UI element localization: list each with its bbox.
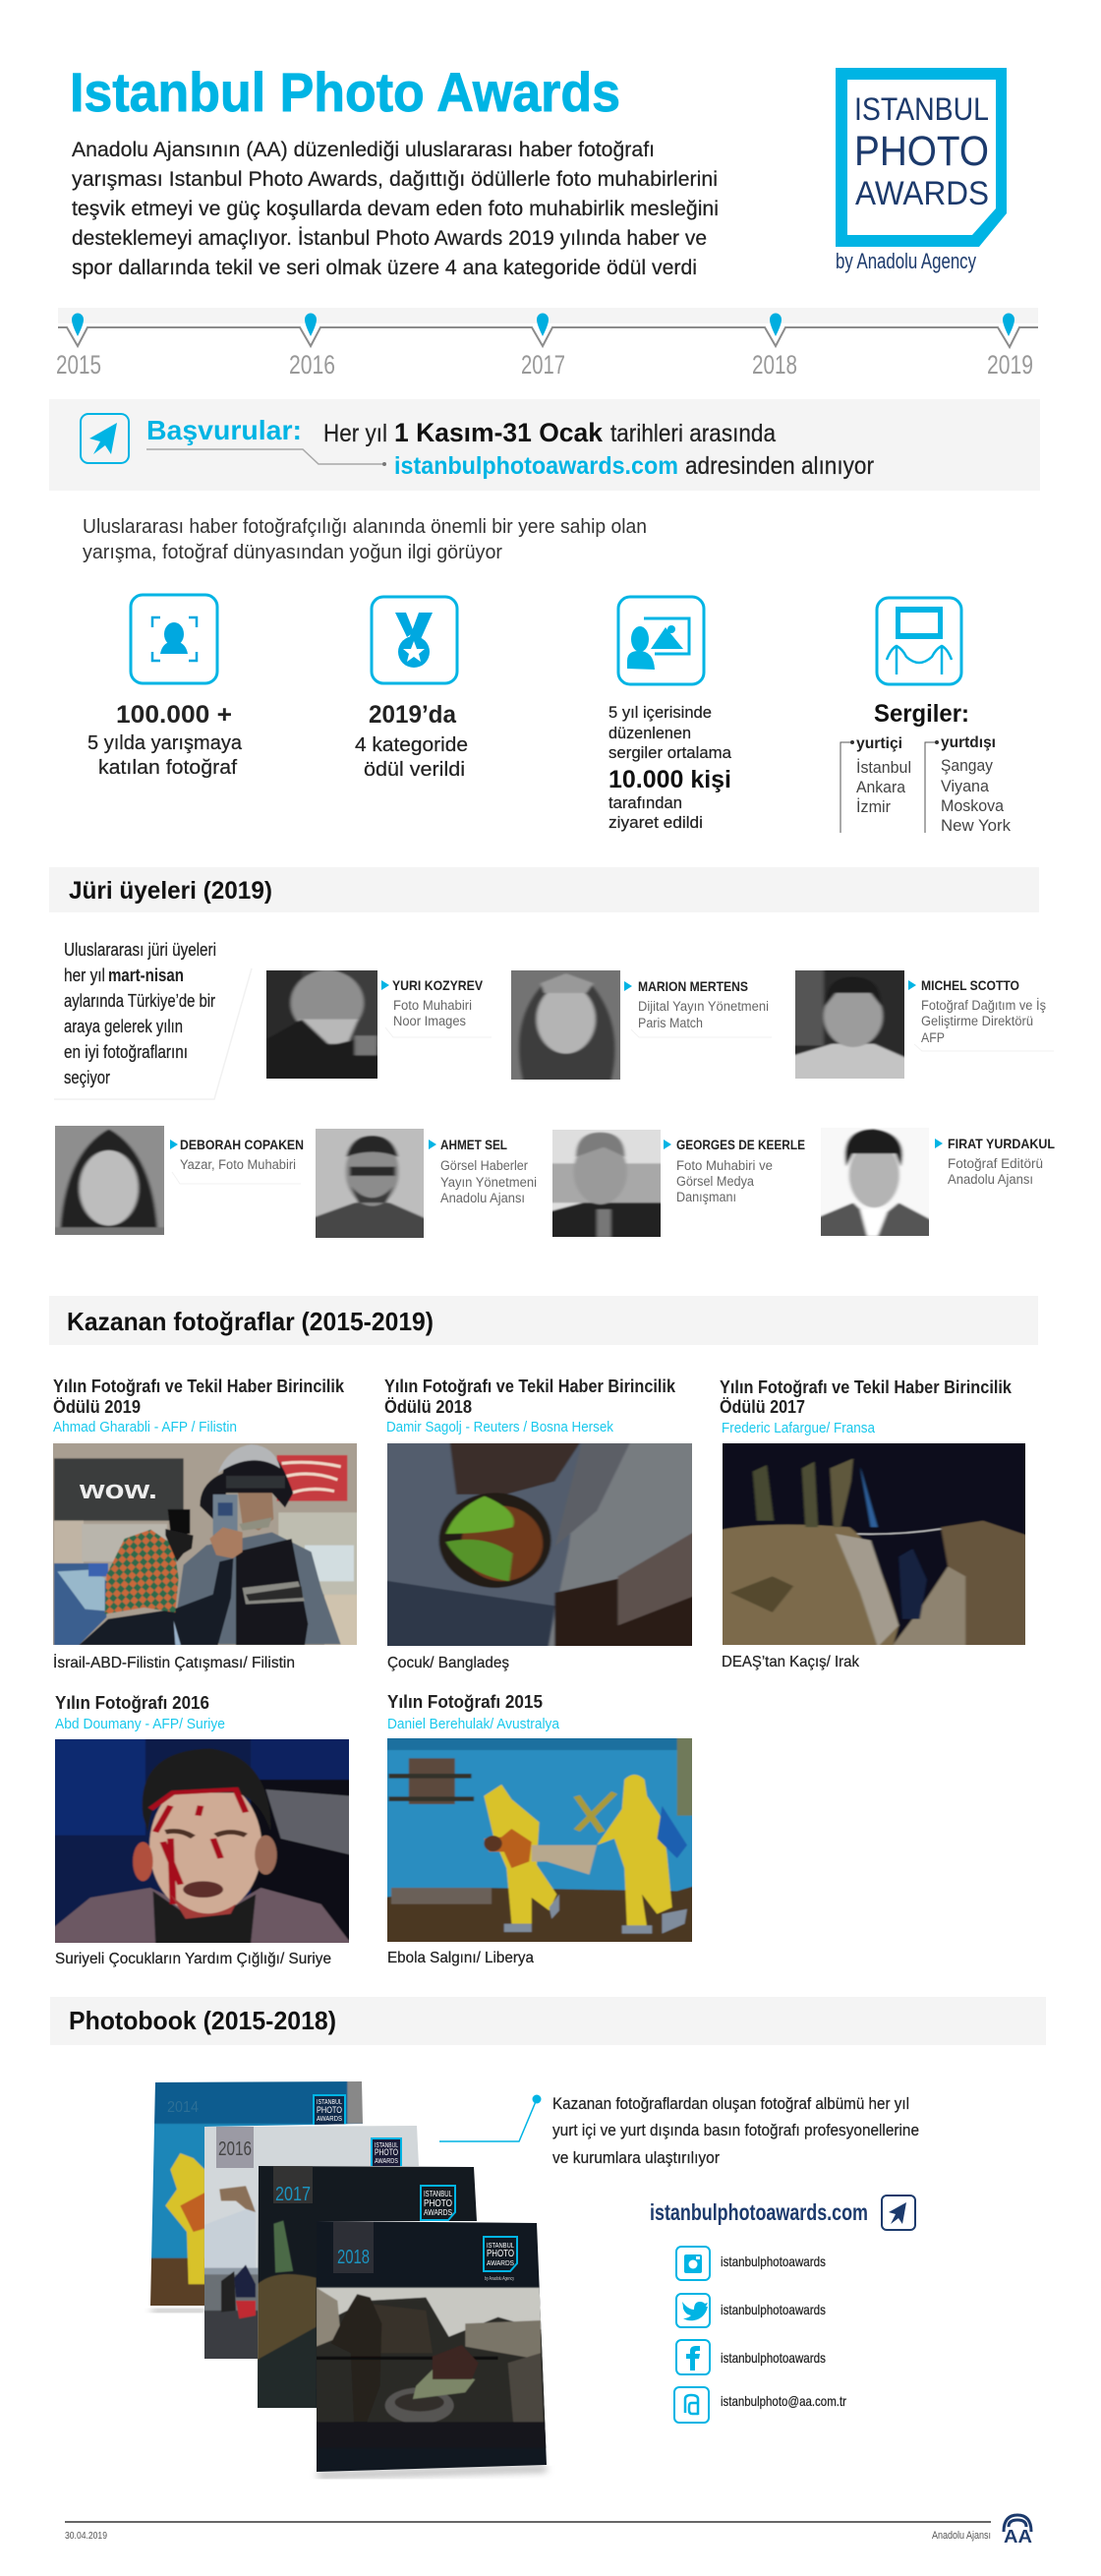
jury name: Marion Mertens: Paris Match [638, 1016, 703, 1030]
jury name: Michel Scotto: MICHEL SCOTTO [921, 977, 1019, 993]
book 2016: PHOTO [375, 2147, 398, 2157]
photo: Israel-Palestine clash: wow. [79, 1475, 157, 1504]
exhibitions list: Moskova [941, 796, 1005, 815]
book 2018: AWARDS [487, 2260, 514, 2267]
jury name: Georges de Keerle: Danışmanı [676, 1190, 736, 1204]
social: email [674, 2387, 846, 2423]
jury name: Ahmet Sel [429, 1137, 537, 1205]
stat: 2019 categories: 2019’da [369, 701, 457, 729]
footer [65, 2515, 1032, 2547]
jury name: Firat Yurdakul: Anadolu Ajansı [948, 1172, 1033, 1187]
photo: Ebola outbreak [381, 1733, 700, 1947]
jury intro text: Uluslararası jüri üyeleri [64, 940, 216, 960]
award 2019 heading: Ahmad Gharabli - AFP / Filistin [53, 1419, 237, 1435]
jury name: Ahmet Sel: Görsel Haberler [440, 1158, 528, 1173]
jury photo: Michel Scotto [795, 970, 904, 1079]
timeline 2015-2019 [56, 308, 1038, 380]
jury name: Michel Scotto [908, 977, 1054, 1051]
jury name: Georges de Keerle: GEORGES DE KEERLE [676, 1137, 805, 1152]
award 2019 heading [53, 1376, 345, 1435]
stat: 100.000 photographs [87, 701, 243, 779]
jury name: Firat Yurdakul: Fotoğraf Editörü [948, 1156, 1043, 1171]
award 2015 heading: Daniel Berehulak/ Avustralya [387, 1716, 560, 1732]
website link: istanbulphotoawards.com [650, 2199, 868, 2225]
jury name: Marion Mertens [624, 978, 772, 1037]
stat: 2019 categories: ödül verildi [364, 759, 465, 781]
jury name: Marion Mertens: Dijital Yayın Yönetmeni [638, 999, 769, 1014]
subtitle text: yarışma, fotoğraf dünyasından yoğun ilgi görüyor [83, 542, 502, 563]
award 2016 heading [55, 1693, 225, 1732]
award 2016 heading: Yılın Fotoğrafı 2016 [55, 1693, 209, 1713]
exhibitions list: İzmir [856, 797, 891, 816]
icon: exhibition visitor [618, 597, 704, 684]
award 2018 heading [384, 1376, 676, 1435]
photo: Syrian child [50, 1737, 356, 1947]
award 2017 heading: Frederic Lafargue/ Fransa [722, 1420, 876, 1436]
book 2014 [147, 2079, 367, 2313]
logo: Istanbul Photo Awards: by Anadolu Agency [836, 249, 976, 273]
applications heading: Başvurular: [146, 415, 302, 445]
jury intro text: seçiyor [64, 1068, 110, 1087]
photobook description: yurt içi ve yurt dışında basın fotoğrafı profesyonellerine [552, 2121, 919, 2139]
jury name: Firat Yurdakul [935, 1136, 1055, 1187]
stat: 100.000 photographs: katılan fotoğraf [98, 757, 237, 779]
book 2017: 2017 [275, 2184, 311, 2205]
award 2015 heading [387, 1692, 560, 1732]
panel: application dates [49, 399, 1040, 491]
jury name: Marion Mertens: MARION MERTENS [638, 978, 748, 994]
logo: Istanbul Photo Awards: AWARDS [855, 175, 989, 212]
panel: application dates: istanbulphotoawards.com [394, 452, 678, 480]
jury photo: Ahmet Sel [316, 1129, 424, 1238]
icon: medal [372, 597, 457, 683]
jury name: Ahmet Sel: AHMET SEL [440, 1137, 507, 1152]
jury photo: Firat Yurdakul [821, 1128, 929, 1236]
heading: jury: Jüri üyeleri (2019) [69, 877, 272, 905]
intro text block: teşvik etmeyi ve güç koşullarda devam eden foto muhabirlik mesleğini [72, 198, 719, 220]
heading: photobook [50, 1997, 1046, 2045]
jury intro text: her yıl [64, 966, 105, 985]
jury name: Yuri Kozyrev: YURI KOZYREV [392, 977, 484, 993]
book 2016: AWARDS [375, 2158, 398, 2165]
social: instagram: istanbulphotoawards [721, 2254, 826, 2269]
jury name: Michel Scotto: Fotoğraf Dağıtım ve İş [921, 998, 1046, 1013]
intro text block: yarışması Istanbul Photo Awards, dağıttığı ödüllerle foto muhabirlerini [72, 168, 718, 191]
exhibitions list: New York [941, 816, 1011, 835]
book 2018: by Anadolu Agency [485, 2276, 514, 2282]
exhibitions list: Sergiler: [874, 700, 969, 728]
social: facebook [676, 2340, 826, 2374]
stat: 100.000 photographs: 100.000 + [116, 701, 232, 729]
heading: photobook: Photobook (2015-2018) [69, 2006, 336, 2035]
icon: Anadolu Agency logo: AA [1004, 2527, 1032, 2547]
book 2014: PHOTO [317, 2105, 342, 2115]
book 2018: 2018 [337, 2247, 370, 2268]
caption: Israel-Palestine clash: İsrail-ABD-Filistin Çatışması/ Filistin [53, 1653, 295, 1671]
jury name: Deborah Copaken [170, 1137, 304, 1184]
stat: 100.000 photographs: 5 yılda yarışmaya [87, 732, 243, 754]
stat: exhibition visitors: 5 yıl içerisinde [608, 703, 712, 722]
award 2019 heading: Ödülü 2019 [53, 1397, 141, 1417]
timeline 2015-2019: 2015 [56, 350, 101, 380]
stat: exhibition visitors: tarafından [608, 793, 682, 812]
exhibitions list: Viyana [941, 777, 990, 795]
book 2014: ISTANBUL [317, 2099, 342, 2106]
exhibitions list [840, 700, 1011, 835]
book 2018: PHOTO [487, 2249, 514, 2259]
photobook stack [147, 2079, 550, 2478]
photo: child in Bangladesh [379, 1438, 702, 1650]
panel: application dates: 1 Kasım-31 Ocak [394, 418, 604, 447]
exhibitions list: İstanbul [856, 758, 911, 777]
footer: Anadolu Ajansı [932, 2530, 991, 2542]
jury photo: Georges de Keerle [552, 1130, 661, 1237]
book 2016: ISTANBUL [375, 2142, 398, 2149]
icon: photo frame person [131, 595, 217, 683]
award 2018 heading: Yılın Fotoğrafı ve Tekil Haber Birincilik [384, 1376, 676, 1396]
exhibitions list: Ankara [856, 778, 905, 796]
jury name: Georges de Keerle [664, 1137, 805, 1204]
stat: 2019 categories: 4 kategoride [355, 734, 468, 756]
jury photo: Deborah Copaken [55, 1126, 164, 1235]
award 2018 heading: Ödülü 2018 [384, 1397, 472, 1417]
stat: exhibition visitors: düzenlenen [608, 724, 691, 742]
award 2016 heading: Abd Doumany - AFP/ Suriye [55, 1716, 225, 1732]
jury intro text [54, 940, 252, 1099]
photobook description: Kazanan fotoğraflardan oluşan fotoğraf albümü her yıl [552, 2094, 909, 2113]
jury photo: Marion Mertens [511, 970, 620, 1080]
jury name: Deborah Copaken: Yazar, Foto Muhabiri [180, 1157, 296, 1172]
footer: 30.04.2019 [65, 2531, 107, 2542]
jury name: Georges de Keerle: Görsel Medya [676, 1174, 754, 1189]
intro text block: desteklemeyi amaçlıyor. İstanbul Photo Awards 2019 yılında haber ve [72, 227, 707, 250]
subtitle text: Uluslararası haber fotoğrafçılığı alanında önemli bir yere sahip olan [83, 516, 647, 538]
jury intro text: aylarında Türkiye’de bir [64, 991, 215, 1011]
jury name: Yuri Kozyrev: Noor Images [393, 1014, 466, 1028]
jury name: Ahmet Sel: Anadolu Ajansı [440, 1191, 525, 1205]
timeline 2015-2019: 2018 [752, 350, 797, 380]
heading: winning photos: Kazanan fotoğraflar (2015-2019) [67, 1307, 434, 1336]
book 2016 [202, 2124, 423, 2362]
book 2018 [315, 2220, 550, 2478]
stat: exhibition visitors: ziyaret edildi [608, 813, 703, 832]
connector arrow to photobook text [439, 2094, 541, 2141]
stat: exhibition visitors [608, 703, 732, 832]
jury name: Yuri Kozyrev: Foto Muhabiri [393, 998, 472, 1013]
intro text block: spor dallarında tekil ve seri olmak üzere 4 ana kategoride ödül verdi [72, 257, 697, 279]
caption: Syrian child: Suriyeli Çocukların Yardım Çığlığı/ Suriye [55, 1951, 331, 1967]
jury name: Michel Scotto: AFP [921, 1030, 945, 1045]
jury photo: Yuri Kozyrev [266, 970, 377, 1079]
intro text block [72, 139, 719, 279]
jury name: Georges de Keerle: Foto Muhabiri ve [676, 1158, 773, 1173]
award 2017 heading: Ödülü 2017 [720, 1397, 805, 1417]
timeline 2015-2019: 2016 [289, 350, 335, 380]
exhibitions list: yurtiçi [856, 735, 902, 752]
photobook description: ve kurumlara ulaştırılıyor [552, 2148, 720, 2167]
timeline 2015-2019: 2019 [987, 350, 1033, 380]
award 2018 heading: Damir Sagolj - Reuters / Bosna Hersek [386, 1419, 613, 1435]
jury name: Firat Yurdakul: FIRAT YURDAKUL [948, 1136, 1055, 1151]
social: facebook: istanbulphotoawards [721, 2350, 826, 2366]
intro text block: Anadolu Ajansının (AA) düzenlediği uluslararası haber fotoğrafı [72, 139, 655, 161]
subtitle text [83, 516, 647, 563]
stat: exhibition visitors: sergiler ortalama [608, 743, 732, 762]
logo: Istanbul Photo Awards [836, 68, 1007, 273]
logo: Istanbul Photo Awards: PHOTO [854, 128, 989, 175]
icon: paper plane [81, 414, 129, 463]
award 2019 heading: Yılın Fotoğrafı ve Tekil Haber Birincilik [53, 1376, 345, 1396]
title: Istanbul Photo Awards [70, 61, 620, 123]
logo: Istanbul Photo Awards: ISTANBUL [854, 91, 989, 127]
stat: exhibition visitors: 10.000 kişi [608, 766, 731, 793]
caption: fleeing ISIS, Iraq: DEAŞ’tan Kaçış/ Irak [722, 1654, 860, 1670]
book 2014: 2014 [167, 2099, 199, 2116]
jury intro text: araya gelerek yılın [64, 1017, 183, 1036]
book 2016: 2016 [218, 2138, 252, 2160]
award 2017 heading: Yılın Fotoğrafı ve Tekil Haber Birincilik [720, 1377, 1013, 1397]
social: twitter [676, 2294, 826, 2327]
jury name: Michel Scotto: Geliştirme Direktörü [921, 1014, 1033, 1028]
caption: child in Bangladesh: Çocuk/ Bangladeş [387, 1655, 509, 1671]
jury name: Ahmet Sel: Yayın Yönetmeni [440, 1175, 537, 1190]
award 2015 heading: Yılın Fotoğrafı 2015 [387, 1692, 543, 1712]
book 2017: PHOTO [424, 2198, 452, 2209]
stat: 2019 categories [355, 701, 468, 781]
photo: Israel-Palestine clash [49, 1440, 364, 1650]
heading: jury [49, 867, 1039, 912]
award 2017 heading [720, 1377, 1013, 1436]
heading: winning photos [49, 1296, 1038, 1345]
book 2018: ISTANBUL [487, 2243, 514, 2250]
photo: fleeing ISIS, Iraq [717, 1438, 1032, 1650]
timeline 2015-2019: 2017 [521, 350, 565, 380]
panel: application dates: adresinden alınıyor [685, 452, 874, 480]
book 2017: ISTANBUL [424, 2190, 452, 2198]
jury intro text: en iyi fotoğraflarını [64, 1042, 188, 1062]
exhibitions list: yurtdışı [941, 734, 996, 751]
caption: Ebola outbreak: Ebola Salgını/ Liberya [387, 1950, 534, 1966]
jury name: Deborah Copaken: DEBORAH COPAKEN [180, 1137, 304, 1152]
panel: application dates: tarihleri arasında [610, 420, 776, 447]
jury intro text: mart-nisan [108, 966, 184, 985]
panel: application dates: Her yıl [323, 420, 387, 447]
social: email: istanbulphoto@aa.com.tr [721, 2393, 846, 2409]
icon: gallery frame with ropes [877, 598, 961, 684]
photobook description [552, 2094, 919, 2167]
jury name: Yuri Kozyrev [381, 977, 492, 1037]
book 2014: AWARDS [317, 2116, 342, 2123]
social: twitter: istanbulphotoawards [721, 2302, 826, 2317]
icon: Anadolu Agency logo [1004, 2515, 1032, 2547]
exhibitions list: Şangay [941, 756, 993, 775]
social: instagram [676, 2247, 826, 2280]
book 2017: AWARDS [424, 2208, 452, 2217]
book 2017 [256, 2163, 482, 2411]
